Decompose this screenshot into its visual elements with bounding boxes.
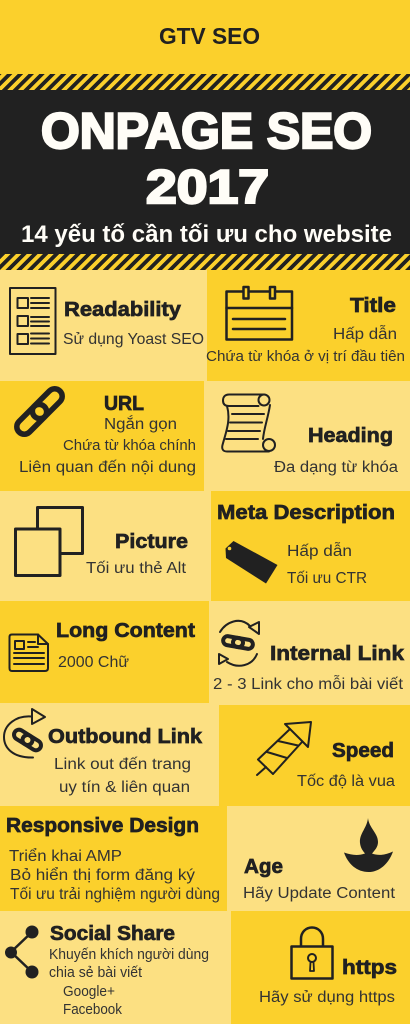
panel: title block [0, 74, 410, 270]
panel: Meta Description [211, 491, 410, 601]
panel: top banner [0, 0, 410, 74]
heading: URL [104, 392, 144, 415]
icon: tag [226, 541, 278, 584]
panel: Outbound Link [0, 703, 219, 806]
description: Chứa từ khóa ở vị trí đầu tiên [206, 349, 405, 365]
brand name: GTV SEO [159, 23, 260, 49]
title line 2: 2017 [146, 160, 269, 213]
description: uy tín & liên quan [59, 779, 190, 796]
description: Chứa từ khóa chính [63, 438, 196, 454]
description: Tối ưu thẻ Alt [86, 560, 187, 577]
description: Tối ưu CTR [287, 570, 367, 587]
description: Liên quan đến nội dung [19, 459, 196, 476]
description: Tối ưu trải nghiệm người dùng [10, 886, 220, 903]
icon: chain link [14, 386, 65, 437]
description: Link out đến trang [54, 756, 191, 773]
icon: article document [10, 634, 48, 671]
panel: Heading [204, 381, 410, 491]
heading: Readability [64, 298, 182, 321]
icon: scroll [222, 394, 275, 452]
panel: Social Share [0, 911, 231, 1024]
description: Đa dạng từ khóa [274, 459, 398, 476]
panel: Internal Link [209, 601, 410, 704]
icon: circular link [219, 621, 259, 666]
icon: outbound link arrow [4, 709, 45, 758]
description: Ngắn gọn [104, 416, 177, 433]
description: Bỏ hiển thị form đăng ký [10, 867, 195, 884]
description: 2000 Chữ [58, 654, 129, 671]
description: 2 - 3 Link cho mỗi bài viết [213, 676, 404, 693]
description: Facebook [63, 1002, 123, 1018]
heading: Age [244, 855, 283, 878]
panel: Age [227, 806, 410, 911]
heading: Social Share [50, 922, 175, 945]
icon: overlapping squares [16, 508, 82, 576]
icon: share nodes [5, 926, 38, 978]
description: Sử dụng Yoast SEO [63, 331, 204, 348]
heading: https [342, 956, 397, 979]
panel: Speed [219, 703, 410, 806]
icon: document checklist [10, 288, 56, 354]
panel: Responsive Design [0, 806, 227, 911]
heading: Picture [115, 530, 188, 553]
description: Khuyến khích người dùng [49, 947, 209, 963]
description: Triển khai AMP [9, 848, 122, 865]
panel: Picture [0, 491, 211, 601]
icon: calendar [226, 287, 292, 340]
icon: rocket [257, 722, 311, 775]
heading: Outbound Link [48, 725, 203, 748]
panel: https [231, 911, 410, 1024]
description: chia sẻ bài viết [49, 965, 142, 981]
description: Google+ [63, 984, 115, 1000]
heading: Long Content [56, 619, 195, 642]
icon: oil lamp [344, 818, 393, 872]
panel: Readability [0, 270, 207, 381]
description: Hãy sử dụng https [259, 989, 395, 1006]
icon: padlock [292, 928, 332, 978]
subtitle: 14 yếu tố cần tối ưu cho website [21, 221, 392, 248]
description: Tốc độ là vua [297, 773, 395, 790]
heading: Responsive Design [6, 814, 199, 837]
panel: Title [206, 270, 410, 381]
description: Hấp dẫn [287, 543, 352, 560]
heading: Meta Description [217, 501, 395, 524]
description: Hấp dẫn [333, 326, 397, 343]
heading: Title [350, 294, 396, 317]
description: Hãy Update Content [243, 885, 396, 902]
panel: URL [0, 381, 204, 491]
heading: Speed [332, 739, 394, 762]
heading: Heading [308, 424, 393, 447]
heading: Internal Link [270, 642, 405, 665]
panel: Long Content [0, 601, 209, 704]
title line 1: ONPAGE SEO [41, 103, 372, 159]
